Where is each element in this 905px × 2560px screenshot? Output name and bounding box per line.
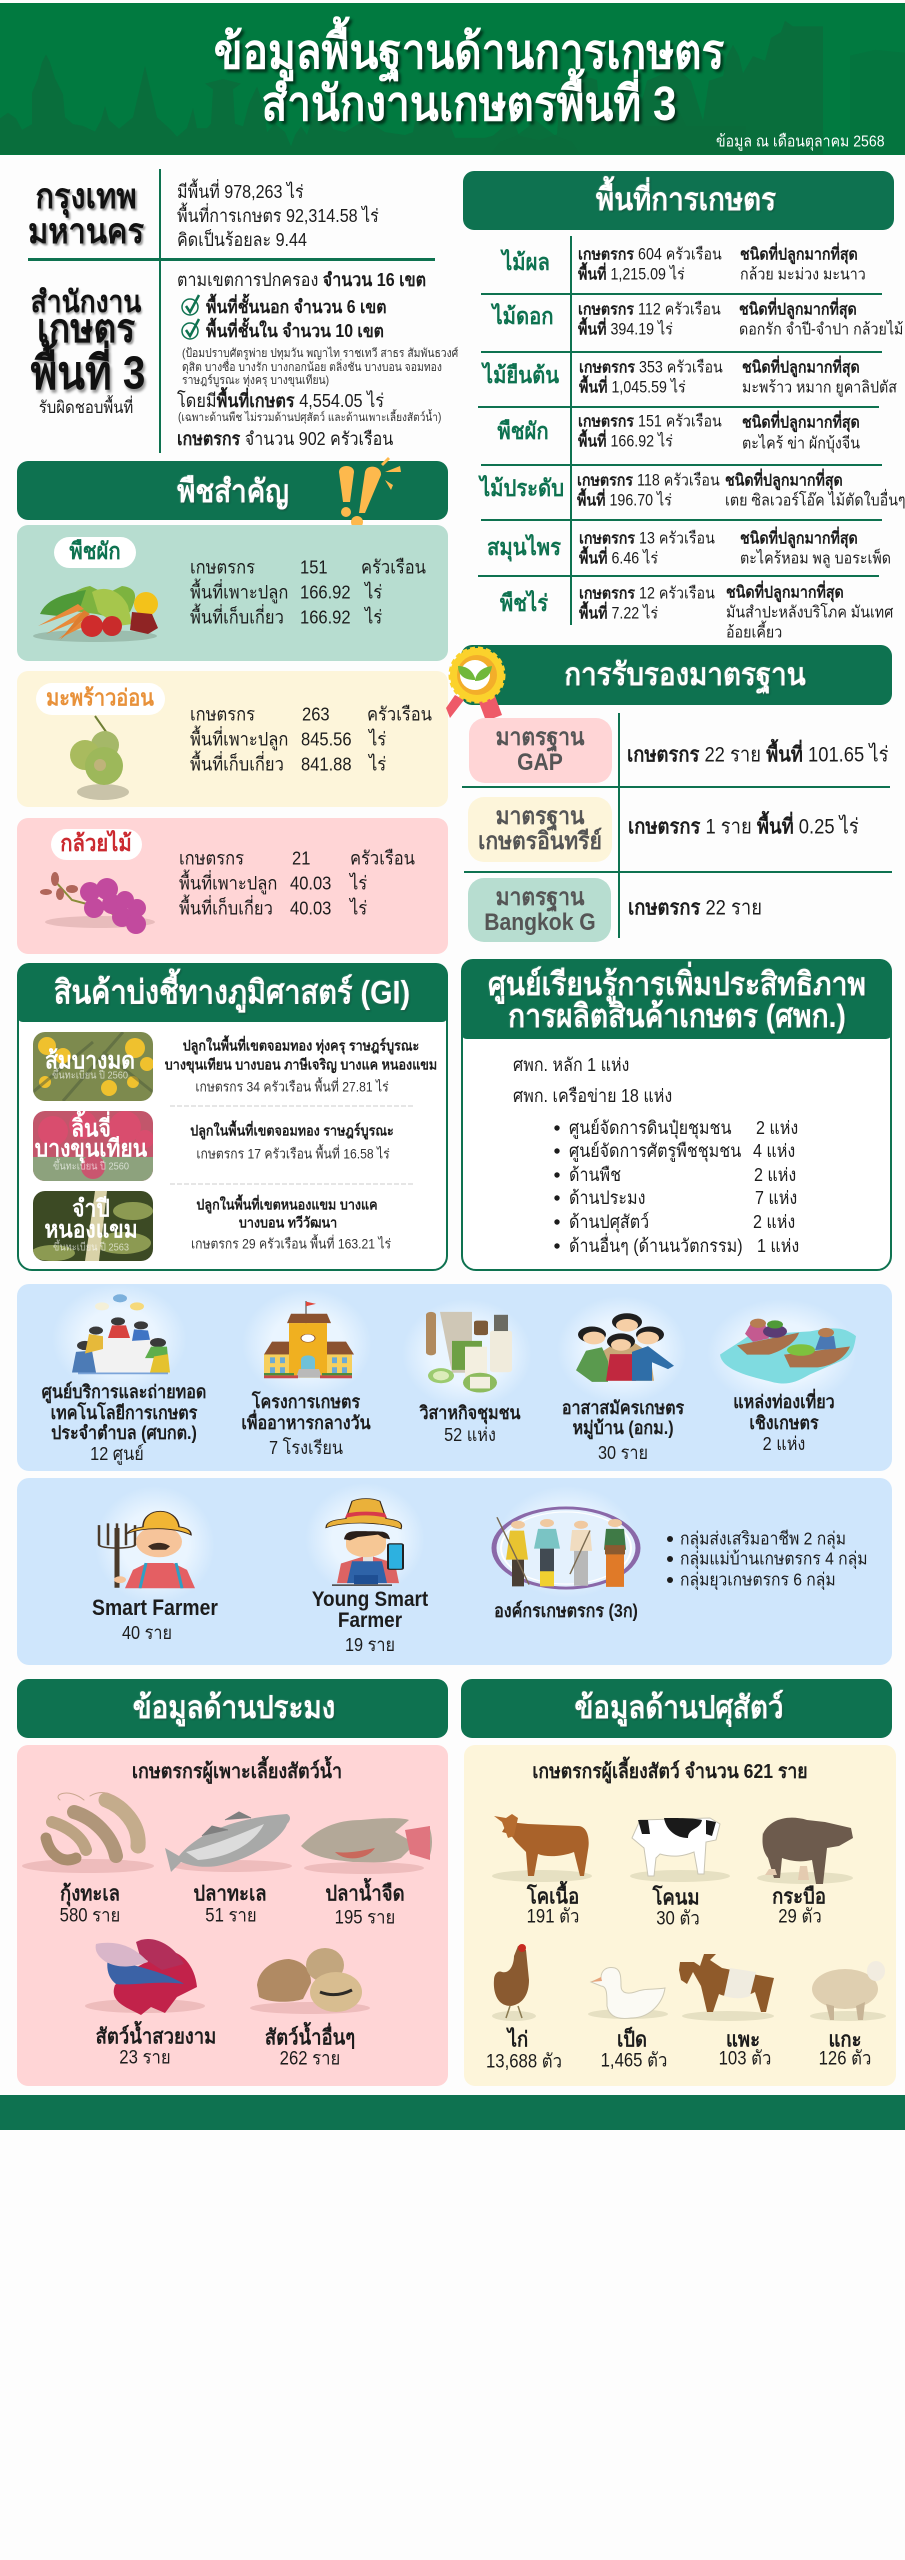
table: agricultural area: มันสำปะหลังบริโภค มันเทศ <box>726 603 893 621</box>
text: orchid data: 21 <box>292 848 310 869</box>
image: Nong Khaem champi: หนองแขม <box>44 1217 138 1244</box>
table: agricultural area: ชนิดที่ปลูกมากที่สุด <box>742 358 860 376</box>
text: Bangkok area <box>177 178 379 250</box>
row: vegetables: พืชผัก <box>497 418 549 444</box>
table: agricultural area: ชนิดที่ปลูกมากที่สุด <box>725 471 843 489</box>
header banner <box>0 3 905 155</box>
text: other aquatic <box>255 2022 365 2072</box>
text: service centre: 12 ศูนย์ <box>90 1443 144 1464</box>
text: service centre: ประจำตำบล (ศบกต.) <box>51 1422 197 1443</box>
heading: office 3: เกษตร <box>37 307 135 351</box>
text: freshwater fish: 195 ราย <box>335 1908 395 1929</box>
table: agricultural area: พื้นที่ 6.46 ไร่ <box>579 549 658 567</box>
row: Bangkok G: มาตรฐาน <box>496 884 584 911</box>
image: Bang Khun Thian lychee: บางขุนเทียน <box>35 1136 147 1163</box>
text: inner districts: พื้นที่ชั้นใน จำนวน 10 เขต <box>206 321 384 341</box>
text: lychee: เกษตรกร 17 ครัวเรือน พื้นที่ 16.58 ไร่ <box>196 1147 390 1162</box>
heading: learning centre <box>461 959 892 1039</box>
text: beef cattle: 191 ตัว <box>527 1907 579 1928</box>
image: Bang Khun Thian lychee: ลิ้นจี่ <box>71 1116 111 1143</box>
panel: learning centre <box>461 959 892 1271</box>
text: fisheries subtitle: เกษตรกรผู้เพาะเลี้ยงสัตว์น้ำ <box>132 1761 342 1783</box>
text: buffalo: กระบือ <box>772 1885 826 1908</box>
text: learning centre list: 2 แห่ง <box>753 1211 795 1232</box>
text: Bangkok area: มีพื้นที่ 978,263 ไร่ <box>177 181 304 202</box>
text: smart farmer: 40 ราย <box>122 1622 172 1643</box>
pill: orchid <box>51 829 142 860</box>
table: agricultural area: เกษตรกร 118 ครัวเรือน <box>577 471 720 489</box>
icon: dairy cow <box>630 1812 734 1884</box>
text: Bang Mot orange: บางขุนเทียน บางบอน ภาษีเจริญ บางแค หนองแขม <box>165 1057 437 1073</box>
text: vegetables data: 151 <box>300 557 328 578</box>
text: dairy cow: โคนม <box>652 1886 700 1909</box>
text: champi <box>191 1194 391 1252</box>
card: orchid <box>17 818 448 954</box>
image: Nong Khaem champi: จำปี <box>72 1196 110 1223</box>
icon: young smart farmer <box>325 1498 404 1586</box>
icon: exclamation marks <box>339 457 401 525</box>
text: young coconut data: พื้นที่เก็บเกี่ยว <box>190 754 284 775</box>
icon: orchid <box>40 872 155 934</box>
pill: vegetables: พืชผัก <box>69 538 121 564</box>
heading: Bangkok <box>28 177 146 251</box>
table: agricultural area: พื้นที่ 196.70 ไร่ <box>577 491 672 509</box>
row: perennials: ไม้ยืนต้น <box>483 362 559 388</box>
text: duck: เป็ด <box>617 2028 647 2051</box>
title: ข้อมูลพื้นฐานด้านการเกษตร <box>214 26 724 79</box>
row: Bangkok G <box>468 878 611 942</box>
table: agricultural area: เตย ซิลเวอร์โอ๊ค ไม้ตัดใบอื่นๆ <box>725 491 905 509</box>
pill: vegetables <box>54 537 136 568</box>
table: agricultural area: ชนิดที่ปลูกมากที่สุด <box>742 413 860 431</box>
text: livestock subtitle: เกษตรกรผู้เลี้ยงสัตว์ จำนวน 621 ราย <box>532 1761 808 1783</box>
table: agricultural area: เกษตรกร 13 ครัวเรือน <box>579 529 715 547</box>
text: learning centre list: ศูนย์จัดการดินปุ๋ยชุมชน <box>569 1117 731 1138</box>
icon: floating market <box>720 1318 856 1384</box>
heading: learning centre: ศูนย์เรียนรู้การเพิ่มประสิทธิภาพ <box>488 966 866 1002</box>
heading: office 3: รับผิดชอบพื้นที่ <box>39 398 133 417</box>
text: vegetables data <box>190 557 426 628</box>
table: agricultural area: ดอกรัก จำปี-จำปา กล้วยไม้ <box>739 320 903 338</box>
text: young coconut data: 841.88 <box>301 754 352 775</box>
row: GAP <box>469 718 612 783</box>
text: learning centre list: ด้านปศุสัตว์ <box>569 1211 649 1232</box>
text: goat <box>700 2028 790 2076</box>
text: orchid data: พื้นที่เก็บเกี่ยว <box>179 898 273 919</box>
panel heading: key crops: พืชสำคัญ <box>177 473 289 509</box>
text: volunteers: หมู่บ้าน (อกม.) <box>572 1417 674 1438</box>
text: orchid data: เกษตรกร <box>179 848 244 869</box>
text: agrotourism: 2 แห่ง <box>763 1433 805 1454</box>
skyline silhouette <box>0 21 823 154</box>
row: fruit trees: ไม้ผล <box>502 249 550 275</box>
table: agricultural area: อ้อยเคี้ยว <box>726 623 782 641</box>
text: smart farmer: Smart Farmer <box>92 1595 218 1620</box>
text: vegetables data: ไร่ <box>365 607 382 628</box>
text: young coconut data: 263 <box>302 704 330 725</box>
text: young smart farmer: Young Smart <box>312 1587 428 1611</box>
text: sea fish <box>180 1880 280 1930</box>
text: ornamental aquatic <box>85 2022 230 2072</box>
text: district list: (ป้อมปราบศัตรูพ่าย ปทุมวัน พญาไท ราชเทวี สาธร สัมพันธวงศ์ <box>182 346 458 360</box>
list: farmer groups: กลุ่มแม่บ้านเกษตรกร 4 กลุ่ม <box>680 1548 868 1568</box>
text: school lunch: โครงการเกษตร <box>252 1391 360 1412</box>
image: Bang Mot orange <box>33 1032 153 1101</box>
table: agricultural area: ชนิดที่ปลูกมากที่สุด <box>740 529 858 547</box>
list: farmer groups: กลุ่มส่งเสริมอาชีพ 2 กลุ่ม <box>680 1528 846 1548</box>
image: Bang Khun Thian lychee: ขึ้นทะเบียน ปี 2560 <box>53 1161 129 1173</box>
row: herbs: สมุนไพร <box>487 534 561 560</box>
text: freshwater fish <box>315 1880 415 1930</box>
text: young smart farmer: Farmer <box>338 1608 402 1632</box>
heading: GI <box>17 963 448 1022</box>
text: Bangkok area: พื้นที่การเกษตร 92,314.58 ไร่ <box>177 205 379 226</box>
text: orchid data: 40.03 <box>290 873 331 894</box>
icon: chicken <box>490 1942 538 2024</box>
text: school lunch: เพื่ออาหารกลางวัน <box>241 1412 371 1433</box>
text: young coconut data: ไร่ <box>369 729 386 750</box>
text: Bang Mot orange: เกษตรกร 34 ครัวเรือน พื้นที่ 27.81 ไร่ <box>195 1080 389 1095</box>
text: young coconut data: พื้นที่เพาะปลูก <box>190 729 288 750</box>
table: agricultural area: พื้นที่ 394.19 ไร่ <box>578 320 673 338</box>
icon: check outer <box>181 294 200 316</box>
table: agricultural area: กล้วย มะม่วง มะนาว <box>740 265 866 283</box>
title <box>214 16 728 131</box>
icon: community products <box>426 1312 512 1392</box>
table: agricultural area: เกษตรกร 151 ครัวเรือน <box>578 412 722 430</box>
text: shrimp <box>40 1880 140 1930</box>
text: vegetables data: พื้นที่เพาะปลูก <box>190 582 288 603</box>
text: vegetables data: เกษตรกร <box>190 557 255 578</box>
text: beef cattle: โคเนื้อ <box>527 1885 579 1908</box>
text: young coconut data: ครัวเรือน <box>367 704 432 725</box>
text: chicken <box>480 2028 570 2076</box>
row: GAP: GAP <box>517 749 563 776</box>
panel heading: livestock: ข้อมูลด้านปศุสัตว์ <box>574 1689 784 1725</box>
table: agricultural area: ชนิดที่ปลูกมากที่สุด <box>739 300 857 318</box>
text: vegetables data: ไร่ <box>365 582 382 603</box>
text: vegetables data: 166.92 <box>300 582 351 603</box>
text: ornamental aquatic: 23 ราย <box>119 2048 171 2069</box>
text: sea fish: ปลาทะเล <box>193 1882 267 1905</box>
text: orchid data <box>179 848 415 919</box>
text: districts: ตามเขตการปกครอง จำนวน 16 เขต <box>177 269 426 290</box>
text: chicken: 13,688 ตัว <box>486 2052 562 2073</box>
text: other aquatic: 262 ราย <box>280 2049 340 2070</box>
text: orchid data: พื้นที่เพาะปลูก <box>179 873 277 894</box>
table: agricultural area: ตะไคร้ ข่า ผักบุ้งจีน <box>742 434 860 452</box>
heading: office 3 <box>30 286 148 417</box>
text: learning centre list: ด้านอื่นๆ (ด้านนวัตกรรม) <box>569 1235 743 1256</box>
list: farmer groups <box>664 1525 884 1595</box>
table: agricultural area: เกษตรกร 12 ครัวเรือน <box>579 584 715 602</box>
icon: school <box>264 1301 354 1378</box>
text: Bangkok area: คิดเป็นร้อยละ 9.44 <box>177 229 307 250</box>
text: agrotourism: เชิงเกษตร <box>749 1412 819 1433</box>
text: dairy cow <box>630 1885 726 1930</box>
heading: Bangkok: กรุงเทพ <box>35 177 137 216</box>
text: young smart farmer: 19 ราย <box>345 1634 395 1655</box>
image: Bang Khun Thian lychee <box>33 1111 153 1181</box>
text: smart farmer <box>92 1595 218 1643</box>
text: champi: ปลูกในพื้นที่เขตหนองแขม บางแค <box>196 1197 378 1213</box>
panel heading: fisheries <box>17 1679 448 1738</box>
table: agricultural area: เกษตรกร 353 ครัวเรือน <box>579 358 723 376</box>
row: organic: เกษตรอินทรีย์ <box>478 828 602 855</box>
icon: beef cattle <box>490 1804 595 1884</box>
text: sheep <box>800 2028 890 2076</box>
text: Bang Mot orange <box>165 1035 437 1095</box>
table: agricultural area: ชนิดที่ปลูกมากที่สุด <box>726 583 844 601</box>
image: Bang Mot orange: ขึ้นทะเบียน ปี 2560 <box>52 1070 128 1082</box>
text: learning centre list: ด้านประมง <box>569 1187 645 1208</box>
row: organic <box>468 797 612 862</box>
text: service centre <box>42 1381 206 1465</box>
footer bar <box>0 2095 905 2130</box>
row: flowers: ไม้ดอก <box>492 303 554 329</box>
row: ornamentals: ไม้ประดับ <box>480 475 564 501</box>
icon: shellfish <box>250 1947 370 2017</box>
panel heading: agricultural area <box>463 171 894 230</box>
text: district list: ดุสิต บางซื่อ บางรัก บางกอกน้อย ตลิ่งชัน บางบอน จอมทอง <box>182 359 442 373</box>
icon: buffalo <box>758 1812 858 1888</box>
heading: Bangkok: มหานคร <box>28 212 144 251</box>
card: vegetables <box>17 525 448 661</box>
text: shrimp: 580 ราย <box>60 1906 120 1927</box>
table: agricultural area: พื้นที่ 1,215.09 ไร่ <box>578 265 685 283</box>
panel: community services <box>17 1284 892 1471</box>
icon: certification badge <box>446 646 506 718</box>
table: agricultural area: พื้นที่ 1,045.59 ไร่ <box>579 378 686 396</box>
text: sheep: แกะ <box>828 2028 862 2051</box>
text: champi: เกษตรกร 29 ครัวเรือน พื้นที่ 163.21 ไร่ <box>191 1237 391 1252</box>
text: volunteers: 30 ราย <box>598 1442 648 1463</box>
icon: sea bass <box>162 1808 292 1876</box>
text: agrotourism: แหล่งท่องเที่ยว <box>733 1391 835 1412</box>
text: community enterprise: 52 แห่ง <box>444 1424 496 1445</box>
row: organic: มาตรฐาน <box>496 803 584 830</box>
table: agricultural area <box>478 236 905 641</box>
icon: duck <box>586 1962 670 2022</box>
table: agricultural area: ชนิดที่ปลูกมากที่สุด <box>740 245 858 263</box>
text: sea fish: 51 ราย <box>205 1906 257 1927</box>
panel heading: agricultural area: พื้นที่การเกษตร <box>596 181 776 217</box>
table: agricultural area: มะพร้าว หมาก ยูคาลิปตัส <box>742 378 897 396</box>
row: Bangkok G: Bangkok G <box>484 909 596 936</box>
text: other aquatic: สัตว์น้ำอื่นๆ <box>265 2026 355 2049</box>
text: district list <box>182 346 458 388</box>
text: service centre: ศูนย์บริการและถ่ายทอด <box>42 1381 206 1402</box>
panel heading: standards: การรับรองมาตรฐาน <box>564 656 806 692</box>
icon: goat <box>678 1950 778 2024</box>
text: sheep: 126 ตัว <box>819 2049 871 2070</box>
title: สำนักงานเกษตรพื้นที่ 3 <box>262 78 676 131</box>
text: school lunch: 7 โรงเรียน <box>269 1437 343 1458</box>
text: shrimp: กุ้งทะเล <box>60 1882 120 1905</box>
image: Nong Khaem champi <box>33 1191 153 1261</box>
panel: geographical indication <box>17 963 448 1271</box>
table: standards: เกษตรกร 22 ราย <box>628 896 762 919</box>
icon: shrimp <box>30 1790 150 1878</box>
text: farmers: เกษตรกร จำนวน 902 ครัวเรือน <box>177 428 393 449</box>
heading: office 3: สำนักงาน <box>31 286 141 319</box>
table: agricultural area: พื้นที่ 7.22 ไร่ <box>579 604 658 622</box>
text: buffalo <box>752 1885 848 1930</box>
text: young smart farmer <box>295 1588 445 1656</box>
icon: meeting <box>72 1294 170 1374</box>
text: farmer organisation: องค์กรเกษตรกร (3ก) <box>494 1600 638 1621</box>
text: dairy cow: 30 ตัว <box>656 1909 700 1930</box>
text: goat: แพะ <box>726 2028 760 2051</box>
text: chicken: ไก่ <box>508 2028 528 2051</box>
text: service centre: เทคโนโลยีการเกษตร <box>51 1402 197 1423</box>
icon: smart farmer <box>98 1510 195 1588</box>
image: Nong Khaem champi: ขึ้นทะเบียน ปี 2563 <box>53 1242 129 1254</box>
pill: orchid: กล้วยไม้ <box>60 830 132 856</box>
text: outer districts: พื้นที่ชั้นนอก จำนวน 6 เขต <box>206 297 386 317</box>
icon: betta fish <box>80 1933 205 2019</box>
heading: learning centre: การผลิตสินค้าเกษตร (ศพก.) <box>508 998 846 1034</box>
text: agrotourism <box>733 1388 835 1454</box>
icon: tilapia <box>298 1815 434 1877</box>
pill: young coconut <box>36 683 165 715</box>
text: Bang Mot orange: ปลูกในพื้นที่เขตจอมทอง ทุ่งครุ ราษฎร์บูรณะ <box>183 1038 419 1054</box>
text: duck <box>590 2028 680 2076</box>
panel: livestock <box>464 1745 896 2086</box>
icon: young coconut <box>70 715 129 800</box>
heading: office 3: พื้นที่ 3 <box>31 346 145 398</box>
text: learning centre list: ศูนย์จัดการศัตรูพืชชุมชน <box>569 1140 741 1161</box>
icon: check inner <box>181 318 200 340</box>
icon: volunteers <box>576 1313 674 1382</box>
text: young coconut data: ไร่ <box>369 754 386 775</box>
text: lychee <box>190 1120 394 1162</box>
text: buffalo: 29 ตัว <box>778 1907 822 1928</box>
text: volunteers <box>562 1397 684 1463</box>
panel heading: fisheries: ข้อมูลด้านประมง <box>133 1689 335 1725</box>
text: vegetables data: 166.92 <box>300 607 351 628</box>
row: GAP: มาตรฐาน <box>496 724 584 751</box>
text: learning centre list: ศพก. หลัก 1 แห่ง <box>513 1054 629 1075</box>
table: standards <box>462 713 892 942</box>
panel heading: livestock <box>461 1679 892 1738</box>
text: learning centre list: 2 แห่ง <box>756 1117 798 1138</box>
text: young coconut data: 845.56 <box>301 729 352 750</box>
heading: GI: สินค้าบ่งชี้ทางภูมิศาสตร์ (GI) <box>54 973 410 1010</box>
text: duck: 1,465 ตัว <box>601 2051 667 2072</box>
panel: Bangkok overview <box>28 169 435 453</box>
text: lychee: ปลูกในพื้นที่เขตจอมทอง ราษฎร์บูรณะ <box>190 1123 394 1139</box>
panel: fisheries <box>17 1745 448 2086</box>
panel: farmer groups <box>17 1478 892 1665</box>
text: young coconut data <box>190 704 432 775</box>
text: learning centre list: 1 แห่ง <box>757 1235 799 1256</box>
text: learning centre list: 7 แห่ง <box>755 1187 797 1208</box>
text: ornamental aquatic: สัตว์น้ำสวยงาม <box>96 2025 216 2048</box>
text: freshwater fish: ปลาน้ำจืด <box>325 1882 405 1905</box>
text: goat: 103 ตัว <box>719 2049 771 2070</box>
table: standards: เกษตรกร 1 ราย พื้นที่ 0.25 ไร่ <box>628 815 859 838</box>
pill: young coconut: มะพร้าวอ่อน <box>46 684 154 710</box>
text: volunteers: อาสาสมัครเกษตร <box>562 1397 684 1418</box>
text: community enterprise <box>419 1402 521 1445</box>
table: agricultural area: เกษตรกร 112 ครัวเรือน <box>578 300 721 318</box>
text: area note: (เฉพาะด้านพืช ไม่รวมด้านปศุสัตว์ และด้านเพาะเลี้ยงสัตว์น้ำ) <box>178 412 441 424</box>
icon: farmer organisation <box>492 1506 640 1590</box>
panel heading: key crops <box>17 461 448 520</box>
text: agricultural area: โดยมีพื้นที่เกษตร 4,554.05 ไร่ <box>177 390 384 411</box>
text: orchid data: 40.03 <box>290 898 331 919</box>
row: field crops: พืชไร่ <box>500 590 548 616</box>
table: agricultural area: เกษตรกร 604 ครัวเรือน <box>578 245 722 263</box>
text: learning centre list: ศพก. เครือข่าย 18 แห่ง <box>513 1085 672 1106</box>
list: farmer groups: กลุ่มยุวเกษตรกร 6 กลุ่ม <box>680 1569 836 1589</box>
icon: sheep <box>808 1960 890 2024</box>
text: orchid data: ครัวเรือน <box>350 848 415 869</box>
text: community enterprise: วิสาหกิจชุมชน <box>419 1402 521 1423</box>
text: beef cattle <box>505 1885 601 1930</box>
panel heading: standards <box>461 645 892 705</box>
text: orchid data: ไร่ <box>350 873 367 894</box>
text: champi: บางบอน ทวีวัฒนา <box>239 1215 337 1231</box>
image: Bang Mot orange: ส้มบางมด <box>45 1048 135 1075</box>
text: school lunch <box>241 1390 371 1458</box>
text: learning centre list: 4 แห่ง <box>753 1140 795 1161</box>
text: district list: ราษฎร์บูรณะ ทุ่งครุ บางขุนเทียน) <box>182 373 329 387</box>
text: young coconut data: เกษตรกร <box>190 704 255 725</box>
text: vegetables data: พื้นที่เก็บเกี่ยว <box>190 607 284 628</box>
text: learning centre list: ด้านพืช <box>569 1164 621 1185</box>
card: young coconut <box>17 671 448 807</box>
text: learning centre list <box>513 1054 799 1256</box>
text: learning centre list: 2 แห่ง <box>754 1164 796 1185</box>
text: orchid data: ไร่ <box>350 898 367 919</box>
data date note: ข้อมูล ณ เดือนตุลาคม 2568 <box>716 133 885 150</box>
text: vegetables data: ครัวเรือน <box>361 557 426 578</box>
icon: vegetables <box>33 586 158 642</box>
table: agricultural area: พื้นที่ 166.92 ไร่ <box>578 432 673 450</box>
table: standards: เกษตรกร 22 ราย พื้นที่ 101.65 ไร่ <box>627 743 888 766</box>
table: agricultural area: ตะไคร้หอม พลู บอระเพ็ด <box>740 549 891 567</box>
